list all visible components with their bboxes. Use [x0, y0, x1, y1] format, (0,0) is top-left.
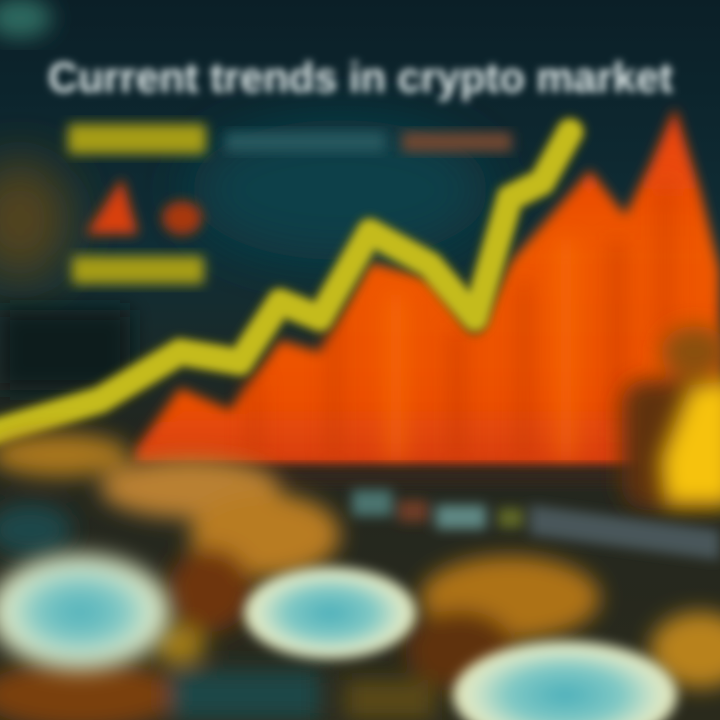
icon: red marker right [162, 201, 202, 235]
icon: coin stack highlight [660, 380, 720, 505]
title: Current trends in crypto market [48, 54, 673, 102]
gold coins [0, 433, 720, 720]
icon: red arrow left [86, 178, 138, 234]
legend: yellow label bottom [72, 256, 204, 284]
coin: blue right [453, 641, 677, 720]
legend: teal label [225, 132, 385, 152]
yellow trend line [0, 132, 570, 432]
chart baseline [130, 466, 720, 486]
orange area chart [135, 108, 720, 470]
icon: coin stack right [622, 326, 720, 510]
coin pile bottom [0, 433, 720, 720]
legend panel [68, 124, 512, 284]
legend: orange label [402, 132, 512, 152]
coin: blue centre [244, 567, 416, 659]
axis labels [352, 490, 720, 560]
chart stripes [248, 180, 672, 460]
coin: blue left [0, 554, 170, 670]
legend: yellow label top [68, 124, 206, 154]
